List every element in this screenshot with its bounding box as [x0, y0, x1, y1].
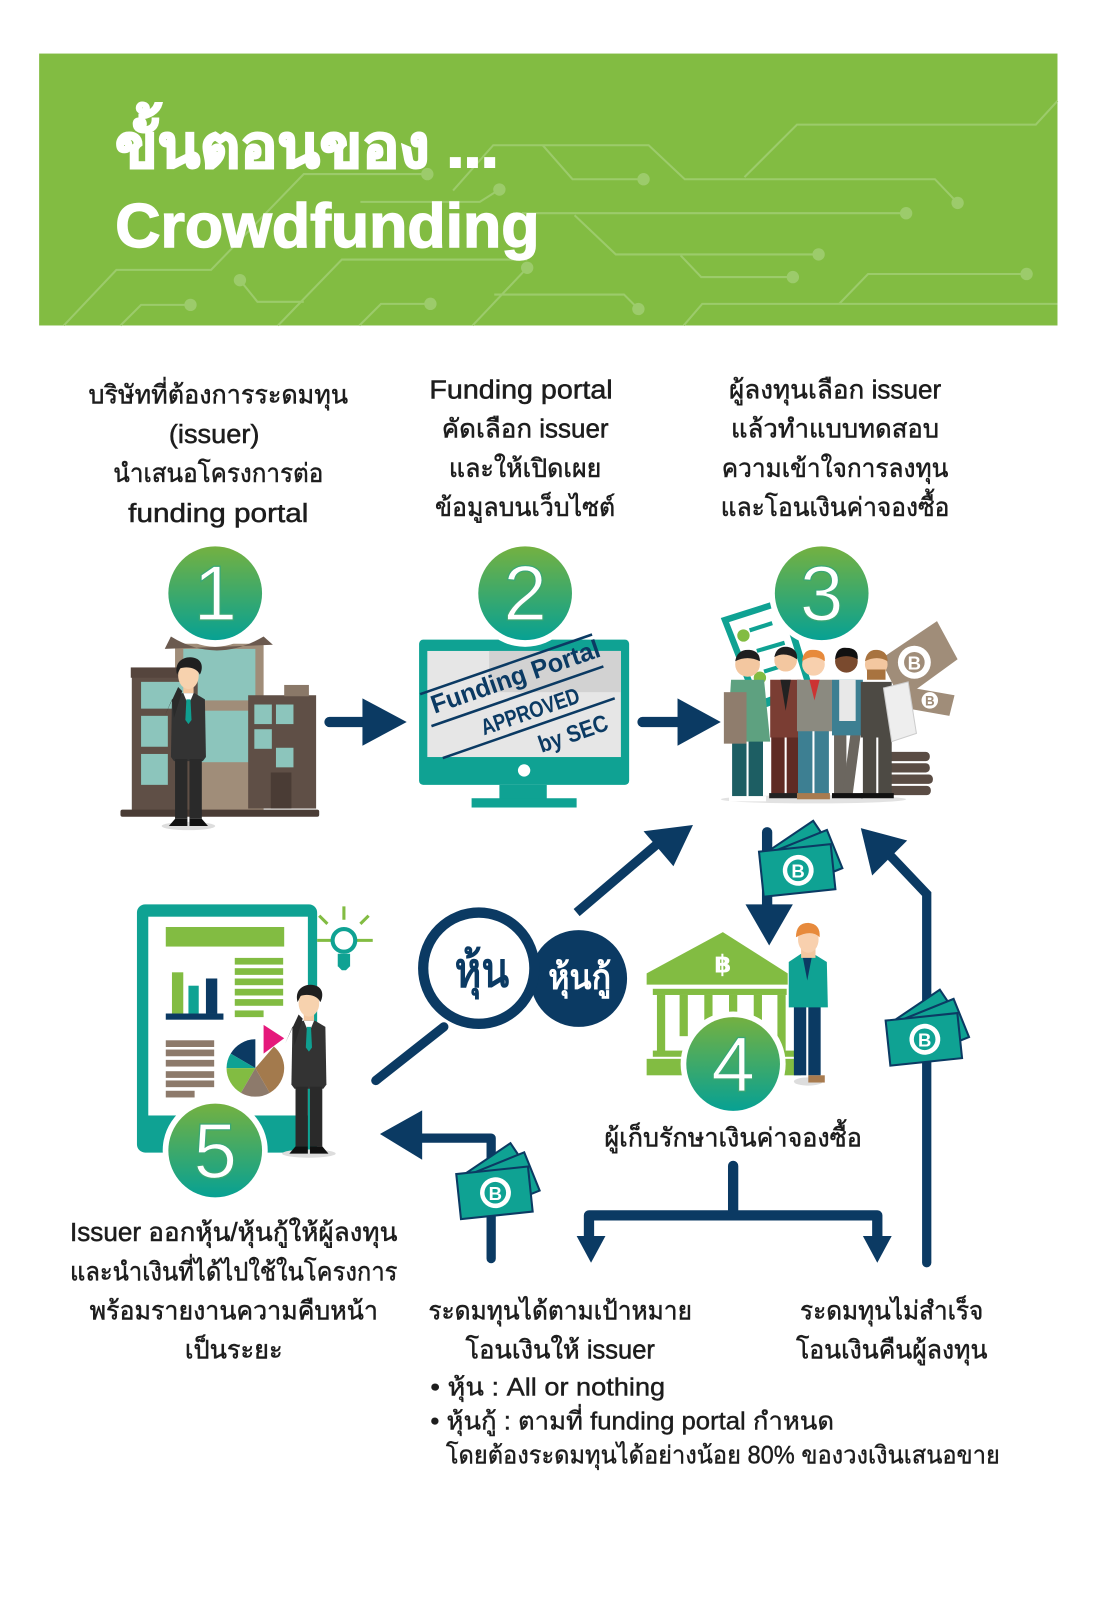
- arrow: step 1 to step 2: [329, 698, 407, 746]
- outcome: target reached: โอนเงินให้ issuer: [465, 1336, 655, 1365]
- investor 3: [797, 650, 832, 799]
- conditions list: • หุ้นกู้ : ตามที่ funding portal กำหนด: [430, 1404, 834, 1437]
- split arrow: success or failure: [577, 1166, 892, 1263]
- step 2 text: และให้เปิดเผย: [449, 454, 601, 483]
- outcome: target not reached: [796, 1294, 987, 1366]
- step 4 badge: [681, 1011, 786, 1117]
- investor 4: [832, 648, 863, 798]
- step 4 badge: 4: [711, 1020, 755, 1108]
- step 3 badge: [769, 541, 874, 646]
- icon: light bulb: [317, 906, 373, 970]
- step 1 text: บริษัทที่ต้องการระดมทุน: [89, 377, 348, 411]
- title: ขั้นตอนของ ...: [115, 103, 498, 180]
- step 3 text: ความเข้าใจการลงทุน: [722, 454, 948, 484]
- step 2 badge: [472, 540, 579, 647]
- outcome: target reached: [428, 1296, 692, 1365]
- step 2 text: ข้อมูลบนเว็บไซต์: [435, 491, 615, 523]
- illustration: investors with questionnaire, money and coins: B: [925, 694, 935, 709]
- pie chart: [227, 1025, 284, 1097]
- illustration: investors with questionnaire, money and coins: [721, 597, 958, 803]
- illustration: monitor approved by SEC: Funding Portal: [427, 635, 604, 719]
- step 5 badge: 5: [193, 1106, 237, 1194]
- step 3 text: แล้วทำแบบทดสอบ: [731, 416, 939, 444]
- step 2 badge: 2: [503, 549, 547, 637]
- arrow: step 3 down to step 4 with money: [745, 821, 842, 946]
- step 3 text: [721, 377, 949, 522]
- shares and debentures magnifier: [376, 913, 627, 1080]
- step 2 text: [429, 377, 615, 523]
- title: Crowdfunding: [115, 192, 540, 261]
- step 1 text: (issuer): [169, 421, 259, 449]
- conditions list: [430, 1375, 1000, 1471]
- outcome: target not reached: ระดมทุนไม่สำเร็จ: [800, 1294, 983, 1326]
- illustration: custodian bank with banker: ฿: [714, 951, 731, 978]
- investor 5: [861, 650, 916, 798]
- conditions list: • หุ้น : All or nothing: [430, 1375, 665, 1403]
- illustration: monitor approved by SEC: [419, 634, 629, 808]
- arrow: refund back to investors: [861, 828, 969, 1263]
- step 5 badge: [163, 1098, 268, 1203]
- outcome: target reached: ระดมทุนได้ตามเป้าหมาย: [428, 1296, 692, 1326]
- illustration: monitor approved by SEC: by SEC: [535, 711, 612, 759]
- step 5 text: และนำเงินที่ได้ไปใช้ในโครงการ: [70, 1253, 398, 1286]
- outcome: target not reached: โอนเงินคืนผู้ลงทุน: [796, 1336, 987, 1366]
- step 5 text: พร้อมรายงานความคืบหน้า: [90, 1297, 378, 1325]
- step 1 badge: [162, 540, 269, 647]
- step 1 badge: 1: [193, 549, 237, 637]
- arrow: shares to investors: [577, 825, 693, 913]
- step 5 text: Issuer ออกหุ้น/หุ้นกู้ให้ผู้ลงทุน: [70, 1218, 397, 1248]
- step 1 text: funding portal: [128, 500, 308, 528]
- step 1 text: นำเสนอโครงการต่อ: [113, 459, 323, 488]
- step 4 text: ผู้เก็บรักษาเงินค่าจองซื้อ: [604, 1119, 862, 1153]
- arrow: step 2 to step 3: [643, 698, 721, 746]
- investor 1: [724, 650, 770, 801]
- illustration: monitor approved by SEC: APPROVED: [477, 682, 583, 740]
- conditions list: โดยต้องระดมทุนได้อย่างน้อย 80% ของวงเงินเสนอขาย: [446, 1442, 1000, 1471]
- bar chart: [166, 972, 223, 1020]
- step 1 text: [89, 377, 348, 528]
- step 3 badge: 3: [800, 549, 843, 637]
- illustration: investors with questionnaire, money and coins: B: [908, 652, 921, 673]
- shares and debentures magnifier: หุ้นกู้: [548, 958, 611, 999]
- step 5 text: [70, 1218, 398, 1365]
- shares and debentures magnifier: หุ้น: [455, 945, 509, 1000]
- investor 2: [769, 647, 801, 798]
- header banner: [39, 54, 1057, 325]
- step 3 text: และโอนเงินค่าจองซื้อ: [721, 489, 949, 522]
- illustration: building with businessman: [120, 637, 319, 830]
- illustration: progress report with charts: [137, 904, 336, 1158]
- title: [115, 103, 540, 261]
- step 5 text: เป็นระยะ: [185, 1334, 283, 1365]
- step 2 text: Funding portal: [429, 377, 613, 405]
- step 3 text: ผู้ลงทุนเลือก issuer: [729, 377, 942, 406]
- illustration: custodian bank with banker: [647, 923, 828, 1086]
- arrow: money to issuer: [380, 1110, 540, 1259]
- step 2 text: คัดเลือก issuer: [442, 416, 609, 444]
